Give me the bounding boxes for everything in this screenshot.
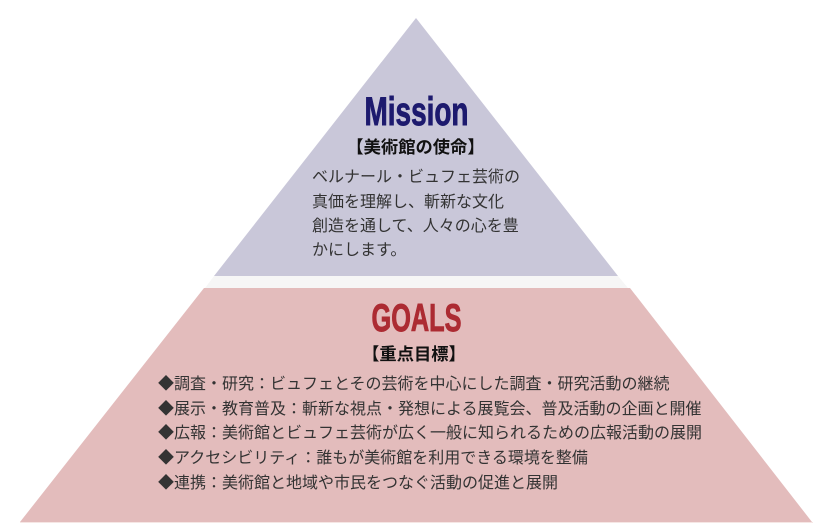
goals list	[158, 375, 702, 492]
mission text block: 真価を理解し、斬新な文化	[312, 193, 504, 211]
mission text block: ベルナール・ビュフェ芸術の	[312, 168, 520, 186]
panel: mission tier	[214, 18, 618, 276]
goals title: GOALS	[372, 297, 462, 340]
mission text block: 創造を通して、人々の心を豊	[312, 217, 519, 235]
panel: goals tier	[20, 288, 813, 523]
mission subheading: 【美術館の使命】	[346, 137, 485, 157]
goals list: ◆アクセシビリティ：誰もが美術館を利用できる環境を整備	[158, 449, 588, 467]
mission text block: かにします。	[312, 241, 406, 259]
goals list: ◆展示・教育普及：斬新な視点・発想による展覧会、普及活動の企画と開催	[158, 400, 702, 418]
goals subheading: 【重点目標】	[362, 344, 466, 364]
mission title: Mission	[364, 90, 468, 134]
goals list: ◆調査・研究：ビュフェとその芸術を中心にした調査・研究活動の継続	[158, 375, 670, 393]
divider band	[205, 276, 628, 288]
mission text block	[312, 168, 520, 259]
goals list: ◆広報：美術館とビュフェ芸術が広く一般に知られるための広報活動の展開	[158, 424, 702, 442]
goals list: ◆連携：美術館と地域や市民をつなぐ活動の促進と展開	[158, 474, 558, 492]
